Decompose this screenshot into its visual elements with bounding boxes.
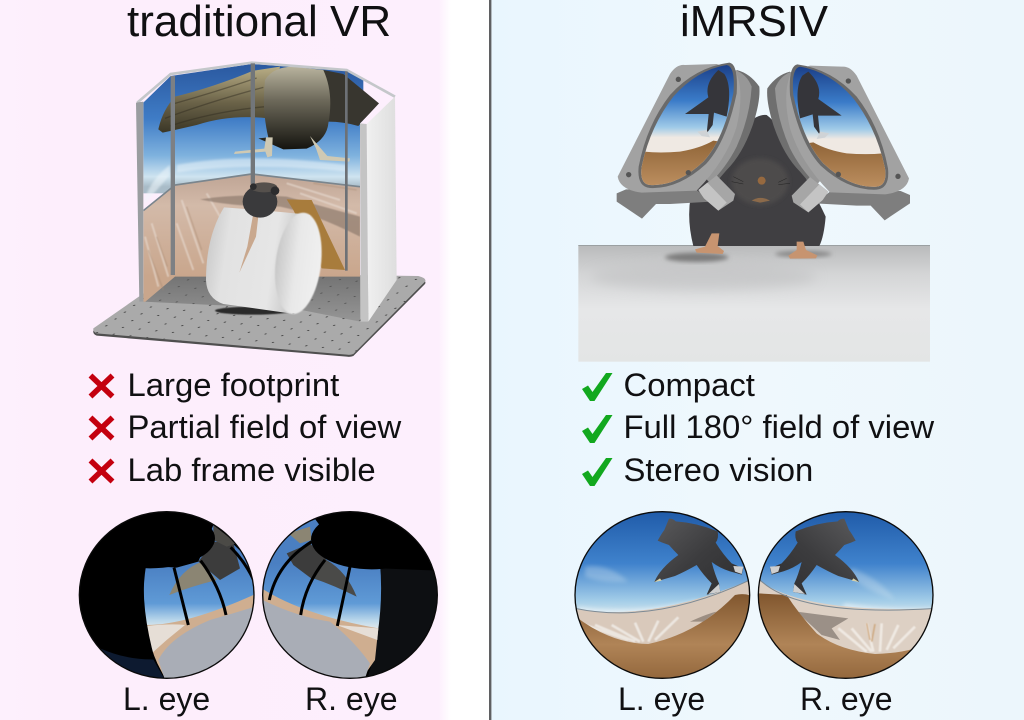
list: drawbacks [90, 366, 401, 488]
text: Partial field of view: Partial field of view [128, 408, 401, 445]
table surface [578, 245, 930, 362]
icon: green check [582, 458, 612, 486]
label: L. eye: L. eye [618, 681, 705, 717]
icon: green check [582, 415, 612, 443]
mouse paws [695, 233, 817, 259]
running wheel [206, 207, 327, 317]
fisheye: left eye view, iMRSIV [572, 508, 753, 682]
panel: traditional VR [77, 0, 440, 717]
breadboard base plate [93, 270, 425, 357]
label: L. eye: L. eye [123, 681, 210, 717]
text: Lab frame visible: Lab frame visible [128, 451, 376, 488]
text: Large footprint: Large footprint [128, 366, 339, 403]
icon: red cross [90, 418, 112, 438]
illustration: mouse wearing goggles [578, 57, 930, 362]
text: Full 180° field of view: Full 180° field of view [624, 408, 934, 445]
screen frame posts [136, 63, 395, 302]
mouse body [689, 115, 826, 246]
mouse on wheel [239, 182, 279, 273]
fisheye: right eye view, traditional VR [260, 509, 440, 680]
label: R. eye: R. eye [305, 681, 397, 717]
fisheye: right eye view, iMRSIV [755, 508, 937, 682]
icon: red cross [90, 376, 112, 396]
panoramic screen with sky and ground [140, 60, 379, 303]
list: advantages [582, 366, 934, 488]
right goggle display [767, 58, 910, 220]
icon: red cross [90, 460, 112, 482]
panel: left background [0, 0, 490, 720]
panel: iMRSIV [572, 0, 937, 717]
illustration: VR rig with panoramic screens [93, 60, 425, 357]
owl shape on screen [158, 67, 379, 162]
text: Compact: Compact [624, 366, 755, 403]
center divider [489, 0, 491, 720]
brown ramp [287, 199, 345, 270]
white side wall [360, 97, 397, 322]
label: R. eye: R. eye [800, 681, 892, 717]
text: Stereo vision: Stereo vision [624, 451, 813, 488]
fisheye: left eye view, traditional VR [77, 508, 257, 680]
left goggle display [617, 57, 760, 219]
panel: right background [490, 0, 1024, 720]
icon: green check [582, 373, 612, 401]
